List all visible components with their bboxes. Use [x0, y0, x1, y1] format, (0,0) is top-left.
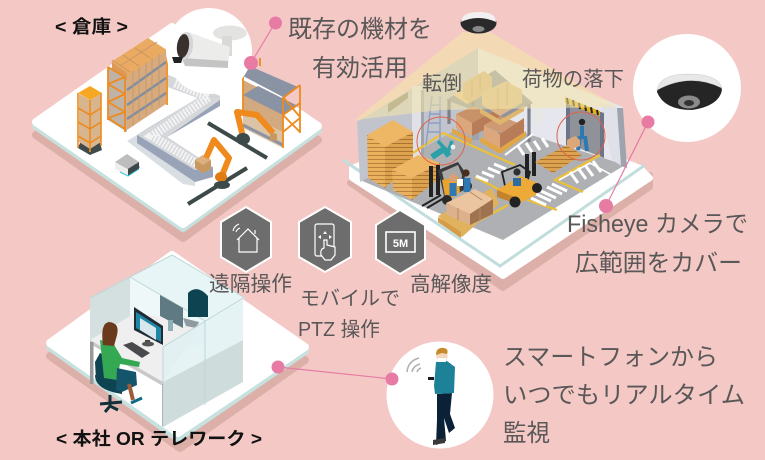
pallet with boxes in front [438, 188, 499, 238]
panel: warehouse platform [36, 8, 318, 238]
panel: office platform [50, 255, 305, 448]
text: fisheye coverage: Fisheye カメラで [567, 211, 748, 238]
back monitor [160, 295, 199, 331]
rack with boxes [446, 70, 533, 154]
front glass partition [163, 298, 243, 427]
conveyor [127, 75, 220, 186]
label: remote operation: 遠隔操作 [209, 273, 292, 296]
warehouse floor [360, 113, 625, 240]
callout circle: fisheye camera [633, 34, 741, 142]
icon: mobile PTZ hexagon [299, 207, 351, 272]
text: fisheye coverage: 広範囲をカバー [575, 250, 742, 277]
pallet stack 2 [392, 155, 440, 200]
heading: head office or telework: < 本社 OR テレワーク > [56, 429, 262, 449]
AGV robot [115, 154, 140, 176]
text: existing equipment: 既存の機材を [288, 16, 432, 43]
pallet stack 1 [367, 120, 413, 188]
label: falling cargo: 荷物の落下 [522, 68, 624, 91]
keyboard [123, 342, 150, 358]
text: smartphone monitoring: スマートフォンから [503, 344, 718, 371]
connector: smartphone [272, 360, 398, 386]
fan view cone [355, 32, 618, 120]
robot tower [78, 86, 102, 155]
teal platform edge [343, 160, 645, 266]
icon: 5M resolution hexagon [376, 210, 425, 274]
text: smartphone monitoring: 監視 [503, 420, 550, 447]
worker with box and pallet [535, 112, 605, 173]
label: fall: 転倒 [422, 72, 462, 95]
desk [90, 313, 202, 426]
forklift left [422, 162, 472, 208]
icon: 5M resolution hexagon: 5M [393, 238, 408, 250]
label: mobile PTZ: モバイルで [300, 288, 400, 310]
icon: ceiling fisheye camera [460, 12, 496, 34]
panel: fisheye warehouse platform [343, 12, 741, 288]
icon: remote operation hexagon [221, 207, 271, 272]
fall incident: ladder, fallen worker [417, 96, 465, 165]
man figure [428, 348, 455, 445]
icon: wifi arcs [407, 358, 421, 372]
back glass partition [90, 255, 245, 347]
text: smartphone monitoring [503, 344, 745, 447]
label: mobile PTZ [298, 288, 400, 341]
shelf: right [236, 58, 300, 148]
yellow floor lines [413, 133, 600, 220]
connector: fisheye [599, 116, 654, 213]
office worker with chair [95, 322, 142, 412]
label: mobile PTZ: PTZ 操作 [298, 318, 380, 341]
text: existing equipment: 有効活用 [312, 55, 408, 82]
connector: existing equipment [244, 16, 282, 70]
shelf: left with boxes [108, 38, 167, 132]
walls [357, 48, 627, 182]
text: smartphone monitoring: いつでもリアルタイム [503, 382, 745, 409]
back chair [188, 289, 208, 317]
heading: warehouse: < 倉庫 > [55, 16, 128, 37]
text: fisheye coverage [567, 211, 748, 277]
callout circle: walking man with smartphone [386, 342, 494, 448]
callout circle: bullet camera [166, 8, 252, 94]
crosswalk stripes [476, 134, 612, 205]
text: existing equipment [288, 16, 432, 82]
robot arm right and track [208, 123, 267, 158]
front monitor [134, 307, 163, 346]
label: high resolution: 高解像度 [410, 273, 492, 296]
robot arm with box [188, 140, 247, 204]
forklift right [497, 152, 542, 208]
